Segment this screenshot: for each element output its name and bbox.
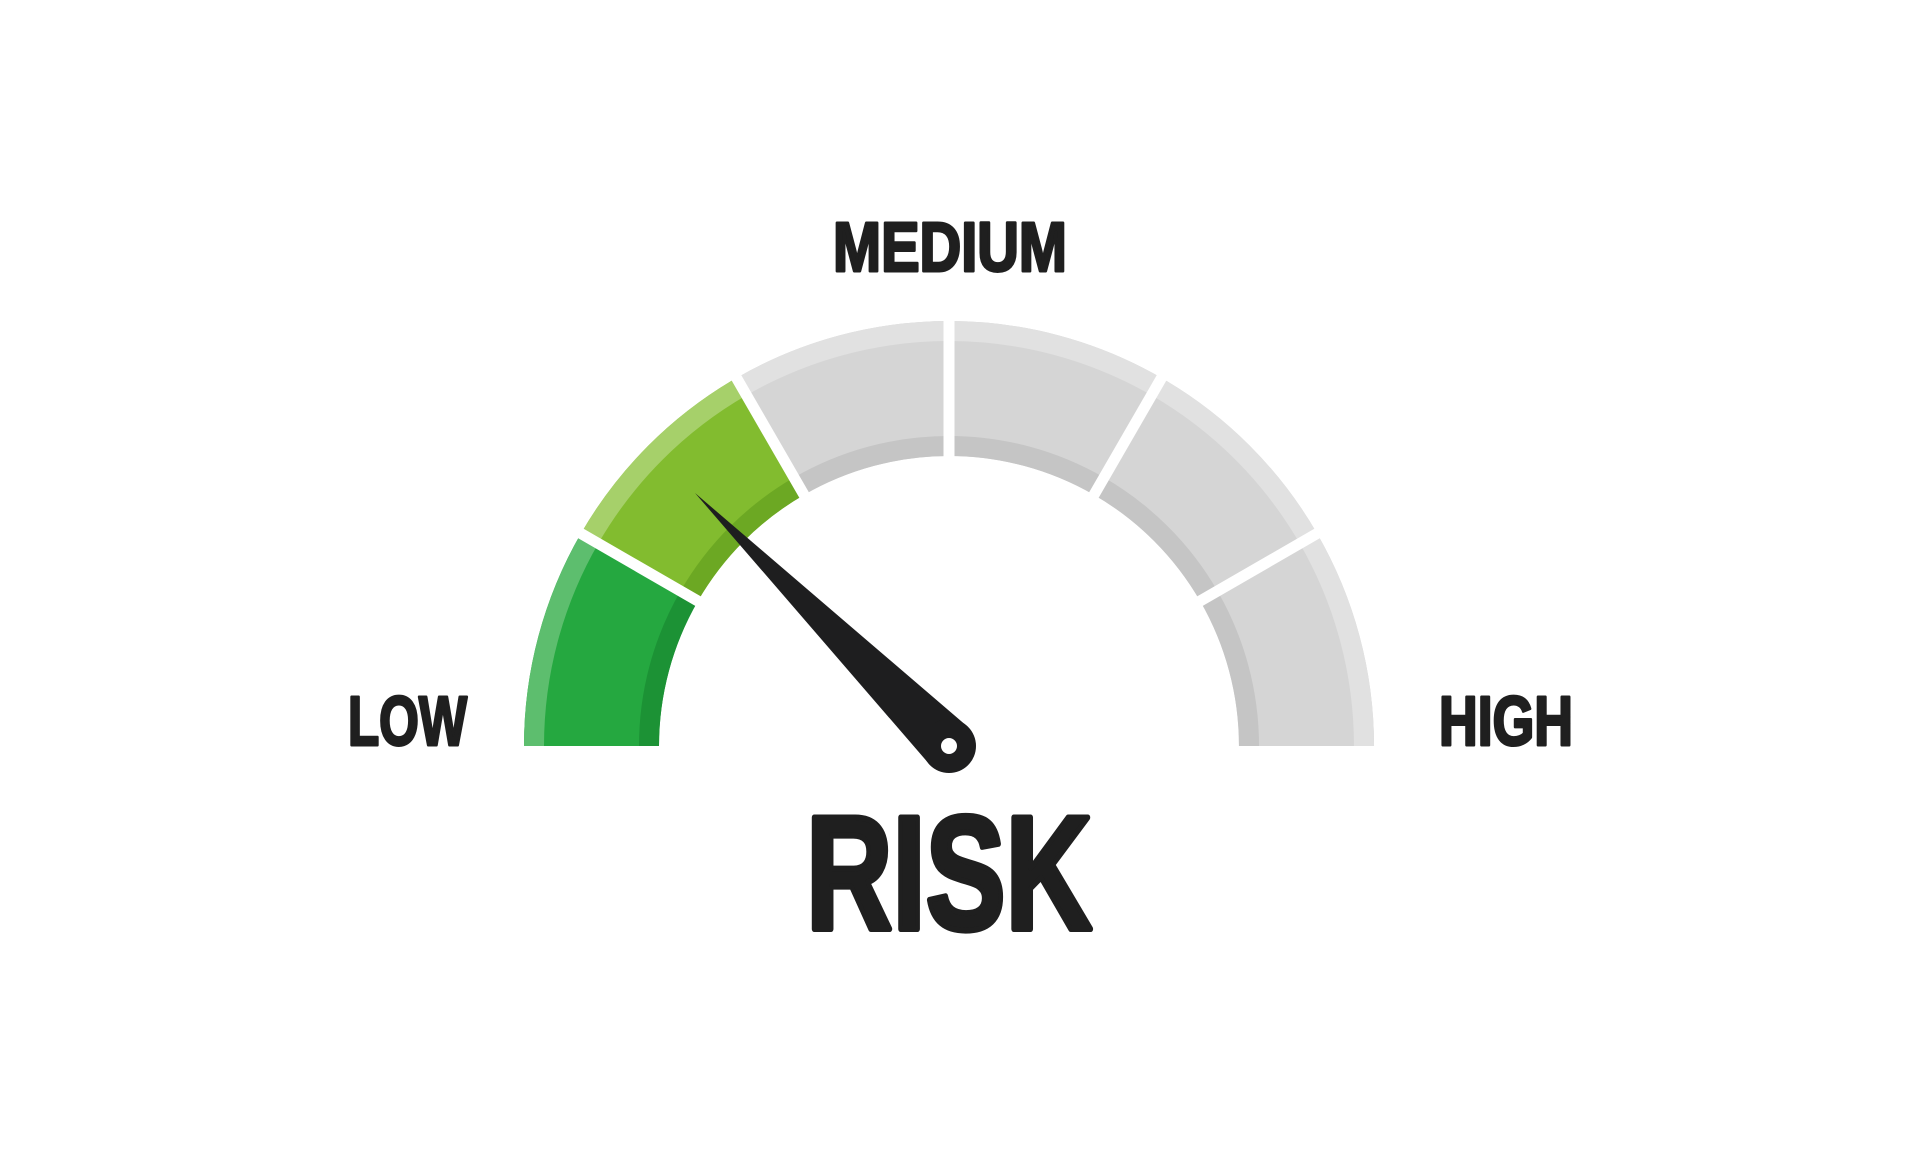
title: risk: RISK xyxy=(806,783,1092,964)
segment: medium left (gray) xyxy=(736,272,1007,529)
segment: medium-high (gray) xyxy=(1075,378,1346,635)
segment: low-medium (light green) xyxy=(581,349,838,620)
segment: medium right (gray) xyxy=(949,321,1162,495)
segment: high (gray) xyxy=(1166,534,1423,804)
gauge dial xyxy=(524,272,1423,1035)
needle xyxy=(695,493,976,773)
label: medium: MEDIUM xyxy=(833,208,1067,286)
segment: low (dark green) xyxy=(524,534,698,746)
label: high: HIGH xyxy=(1439,682,1573,760)
label: low: LOW xyxy=(348,682,467,760)
